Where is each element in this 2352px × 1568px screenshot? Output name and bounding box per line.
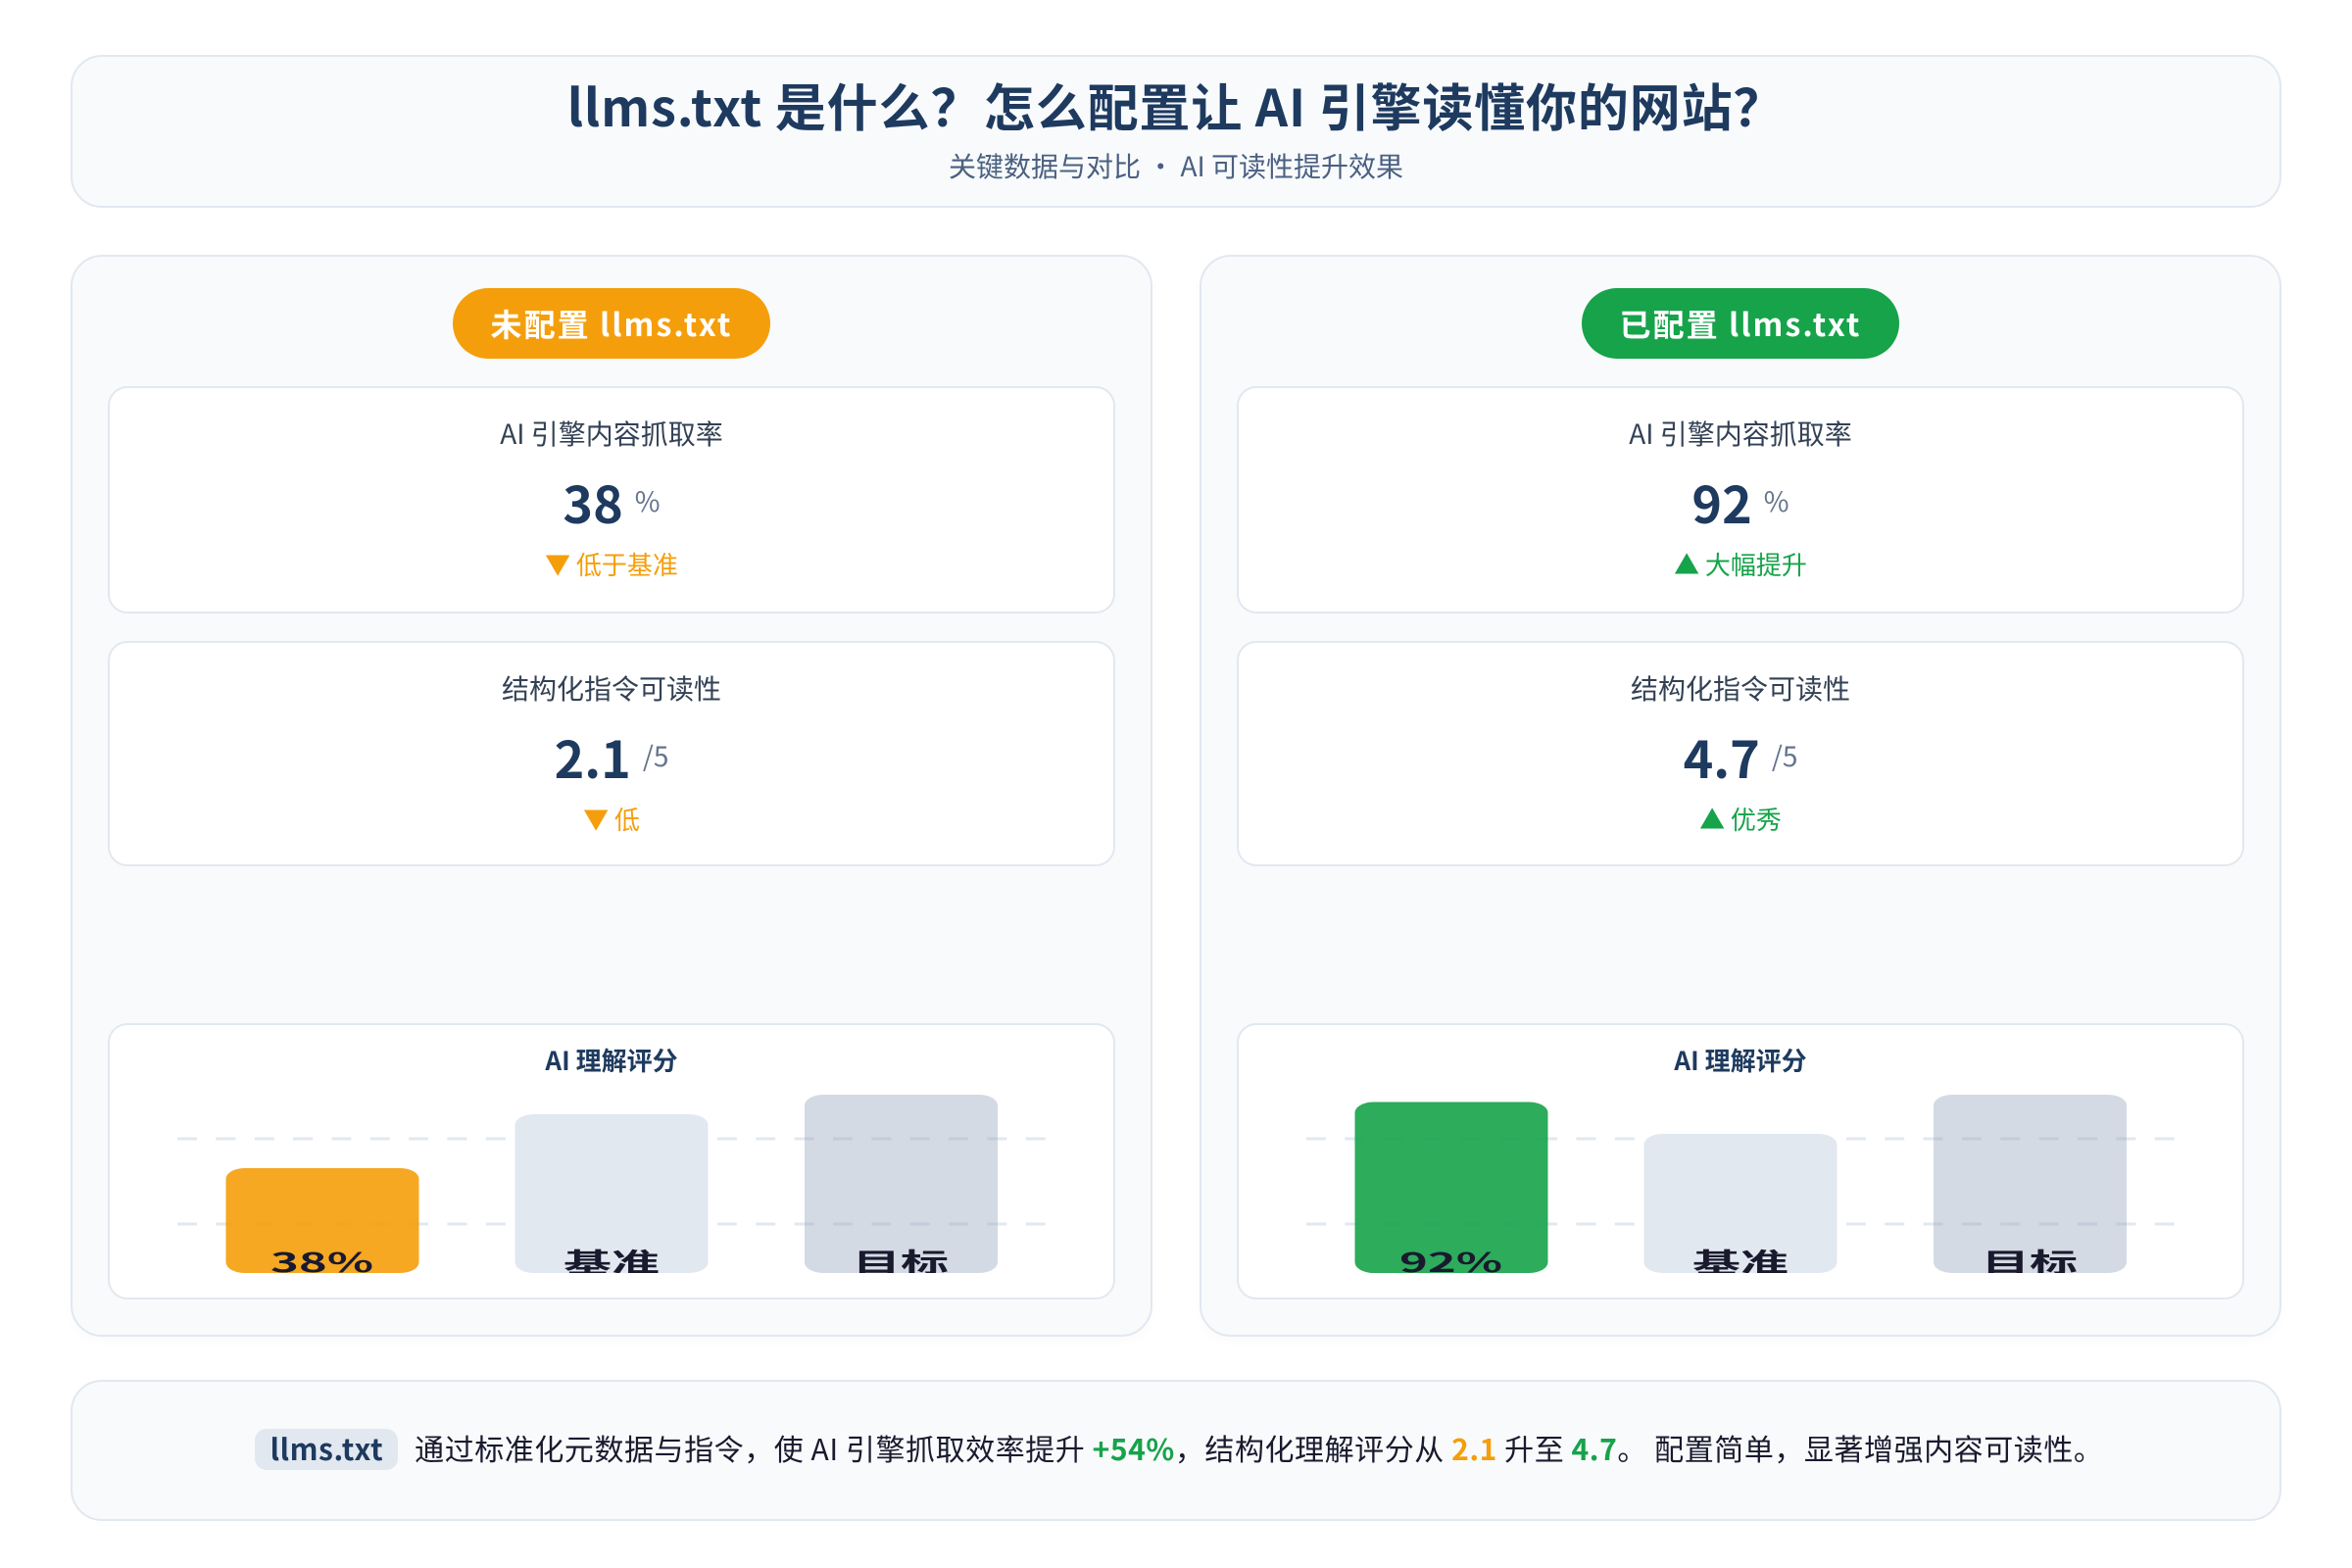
trend: below baseline: ▼ 低于基准 xyxy=(545,546,678,582)
bar chart: with llms.txt xyxy=(1306,1095,2175,1273)
footer summary panel xyxy=(71,1380,2281,1521)
subtitle: 关键数据与对比 · AI 可读性提升效果 xyxy=(949,146,1403,185)
panel: with llms.txt xyxy=(1200,255,2281,1337)
bar: 92% xyxy=(1354,1102,1548,1280)
bar: baseline xyxy=(515,1114,708,1280)
metric value: 2.1 /5 xyxy=(555,719,668,793)
badge: not configured xyxy=(453,288,770,359)
metric label: 结构化指令可读性 xyxy=(1631,668,1850,708)
trend: low: ▼ 低 xyxy=(583,801,640,837)
bar: 38% xyxy=(225,1168,419,1280)
chart card: AI understanding score xyxy=(1237,1023,2244,1299)
chart title: AI 理解评分 xyxy=(545,1042,678,1078)
metric card: readability 4.7 xyxy=(1237,641,2244,866)
metric value: 92 % xyxy=(1691,465,1789,538)
metric label: 结构化指令可读性 xyxy=(502,668,721,708)
metric card: readability 2.1 xyxy=(108,641,1115,866)
metric label: AI 引擎内容抓取率 xyxy=(1629,414,1852,453)
badge: configured: 已配置 llms.txt xyxy=(1619,301,1862,346)
metric card: crawl rate 38% xyxy=(108,386,1115,613)
metric value: 38 % xyxy=(563,465,661,538)
summary text: 通过标准化元数据与指令，使 AI 引擎抓取效率提升 +54%，结构化理解评分从 2.1 升至 4.7。 配置简单，显著增强内容可读性。 xyxy=(415,1426,2103,1469)
title: llms.txt 是什么？ 怎么配置让 AI 引擎读懂你的网站？ xyxy=(567,68,1785,141)
header panel xyxy=(71,55,2281,208)
bar: baseline xyxy=(1644,1134,1837,1280)
bar: target xyxy=(1934,1095,2127,1280)
metric value: 4.7 /5 xyxy=(1684,719,1797,793)
metric label: AI 引擎内容抓取率 xyxy=(500,414,723,453)
bar chart: without llms.txt xyxy=(177,1095,1046,1273)
badge: configured xyxy=(1582,288,1899,359)
panel: without llms.txt xyxy=(71,255,1152,1337)
chart card: AI understanding score xyxy=(108,1023,1115,1299)
badge: not configured: 未配置 llms.txt xyxy=(490,301,733,346)
summary text: llms.txt xyxy=(270,1426,383,1469)
chart title: AI 理解评分 xyxy=(1674,1042,1807,1078)
trend: big increase: ▲ 大幅提升 xyxy=(1674,546,1807,582)
metric card: crawl rate 92% xyxy=(1237,386,2244,613)
trend: excellent: ▲ 优秀 xyxy=(1699,801,1782,837)
bar: target xyxy=(805,1095,998,1280)
